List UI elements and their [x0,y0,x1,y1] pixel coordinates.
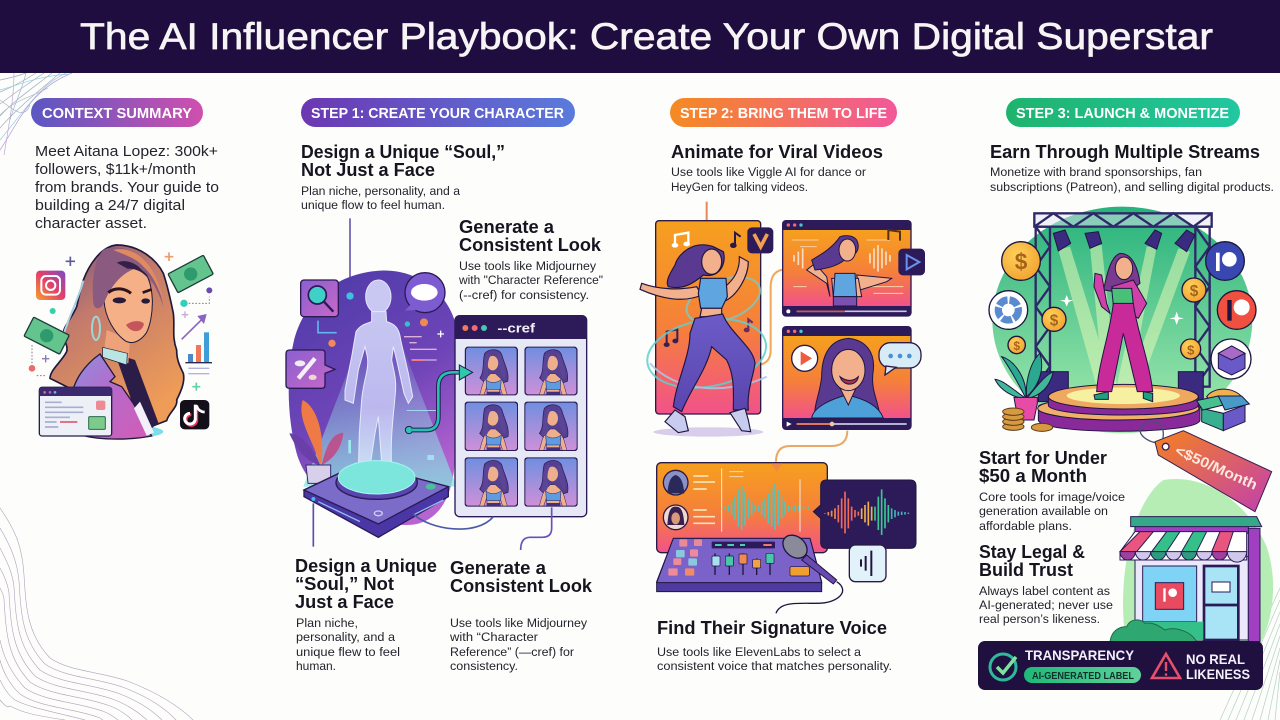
text block: start for under 50: affordable plans. [979,519,1072,533]
light beams [1058,245,1190,387]
icon: plant [289,400,343,483]
decorative line pattern: bottom right [1220,588,1280,720]
heading pill: context summary: CONTEXT SUMMARY [42,106,192,122]
icons: revenue circles [989,242,1256,379]
heading pill: step 2 [670,98,897,127]
price tag [1155,431,1272,512]
cref label: --cref [497,321,536,335]
tag string [1140,421,1163,443]
icon: player bar [786,309,907,313]
coin labels: $ [1050,312,1059,329]
icon: browser window [39,387,112,436]
text block: animate for viral videos [671,141,883,194]
panel: context summary [24,98,219,439]
connector: dance card to video [758,269,787,365]
text block: context summary: building a 24/7 digital [35,197,185,214]
text block: design a unique soul lower: Design a Unique [295,555,437,576]
icon: jacket [71,354,152,439]
heading pill: context summary [31,98,203,127]
panel: video window 1 [782,220,912,317]
icon: mixer [657,538,822,592]
no real likeness label: NO REAL [1186,651,1245,667]
icon: tiktok [180,400,209,429]
no real likeness label: LIKENESS [1186,666,1250,682]
icon: performer [1094,253,1153,402]
transparency label: TRANSPARENCY [1025,647,1135,663]
text block: context summary: character asset. [35,215,147,232]
text block: start for under 50 [979,447,1125,533]
price label: <$50/Month [1172,443,1260,494]
icon: player bar [787,422,907,427]
icon: check badge [990,654,1016,680]
text block: context summary: followers, $11k+/month [35,161,196,178]
illustration: character creation platform [286,218,587,550]
connector lines [347,218,352,297]
patreon mark [1163,588,1177,602]
text block: design a unique soul lower: “Soul,” Not [295,573,394,594]
icon: front hair [93,247,163,308]
text block: context summary [35,143,219,232]
panel: cref window [455,316,587,517]
icon: face [104,267,152,343]
connector: window to label [521,507,552,550]
connector: video to voice [776,431,847,462]
text block: find their signature voice: Find Their Signature Voice [657,617,887,638]
stage truss [1034,213,1212,387]
decorative data elements [318,292,444,460]
green backdrop [1123,479,1273,643]
text block: generate a consistent look: with "Character Reference" [458,273,603,287]
title banner [0,0,1280,73]
bush [1110,620,1197,642]
text block: context summary: from brands. Your guide to [35,179,219,196]
illustration: animation and voice [640,202,925,613]
green backdrop [992,207,1252,433]
text block: generate a consistent look lower: consistency. [450,659,518,673]
text block: start for under 50: Core tools for image/voice [979,490,1125,504]
icon: sparkles and dots [29,252,212,391]
text block: generate a consistent look: (--cref) for consistency. [459,288,589,302]
icon: shirt [134,402,154,436]
waveform: colorful [825,508,835,519]
text block: earn through multiple streams: subscriptions (Patreon), and selling digital products. [990,180,1274,194]
text block: stay legal and build trust: Stay Legal & [979,541,1085,562]
text block: generate a consistent look: Use tools like Midjourney [459,259,597,273]
light beam [303,340,457,487]
sparkles [1060,295,1184,325]
icon: dancer [640,245,755,433]
icon: talking head [812,338,883,418]
waveform [794,245,890,272]
text block: design a unique soul lower: Just a Face [295,591,394,612]
heading pill: step 1 [301,98,575,127]
heading pill: step 1: STEP 1: CREATE YOUR CHARACTER [311,106,565,122]
text block: stay legal and build trust [979,541,1113,626]
text block: animate for viral videos: HeyGen for talking videos. [671,180,808,194]
text block: earn through multiple streams [990,141,1274,194]
text block: generate a consistent look lower: Use tools like Midjourney [450,616,588,630]
spotlights [1053,230,1195,252]
text block: generate a consistent look lower: Reference” (—cref) for [450,645,574,659]
icon: money bill left [24,317,69,354]
illustration: storefront and price tag [1110,431,1273,643]
icon: pencil tile [286,350,335,388]
panel: video window 2 [782,326,921,430]
icon: motion swirls [642,268,772,397]
text block: find their signature voice: Use tools like ElevenLabs to select a [657,645,861,659]
text block: generate a consistent look: Consistent Look [459,234,602,255]
text block: animate for viral videos: Animate for Viral Videos [671,141,883,162]
door [1204,566,1238,640]
purple blob [289,271,458,525]
coin labels: $ [1013,339,1020,353]
panel: dance video card [640,221,772,437]
icon: chat bubble [879,343,921,375]
illustration: stage [989,207,1256,443]
icon: play tile [898,249,925,275]
icon: instagram [36,271,65,300]
coin labels: $ [1187,343,1195,358]
icon: magnifier tile [301,280,338,317]
text block: design a unique soul lower: unique flew to feel [296,645,400,659]
icon: avatars [663,470,688,530]
text block: stay legal and build trust: AI-generated; never use [979,598,1113,612]
icon: figure hologram [345,280,413,487]
title: The AI Influencer Playbook: Create Your Own Digital Superstar [80,15,1213,57]
text block: generate a consistent look lower: with “Character [449,630,538,644]
awning [1120,532,1247,562]
text block: design a unique soul: Not Just a Face [301,159,435,180]
text block: earn through multiple streams: Earn Through Multiple Streams [990,141,1260,162]
connector: platform to label [311,503,316,547]
icon: patreon marks [1216,252,1250,321]
icon: treasure box [1197,389,1249,431]
text block: generate a consistent look [458,216,603,302]
panel: step 3 [978,98,1274,690]
icon: viggle logo [747,227,773,253]
panel: step 1 [286,98,603,673]
chart: mini bar chart [182,314,212,374]
character reference tiles [465,347,577,506]
text block: design a unique soul lower: Plan niche, [296,616,358,630]
heading pill: step 3: STEP 3: LAUNCH & MONETIZE [1016,106,1229,122]
text block: generate a consistent look: Generate a [459,216,555,237]
text block: generate a consistent look lower [449,557,593,673]
heading pill: step 2: STEP 2: BRING THEM TO LIFE [680,106,887,122]
icon: play button [792,345,818,371]
coin labels [1013,248,1199,358]
panel: dark waveform [813,480,916,548]
icon: color wheel [998,300,1018,320]
storefront [1120,517,1262,642]
text block: generate a consistent look lower: Consistent Look [450,575,593,596]
icon: speech bubble [405,273,445,313]
text block: start for under 50: $50 a Month [979,465,1087,486]
icon: teal glow [90,425,163,438]
speakers [1038,372,1203,402]
icon: waveform tile [849,545,886,582]
icon: platform [304,461,448,537]
stage platform [1038,384,1200,431]
ai-generated label: AI-GENERATED LABEL [1032,671,1134,682]
icon: neck and choker [103,330,130,363]
text block: start for under 50: generation available on [979,504,1108,518]
text block: design a unique soul [301,141,505,212]
text block: stay legal and build trust: Build Trust [979,559,1073,580]
icon: microphone [776,530,843,613]
icon: money bill right [168,255,213,293]
coin labels: $ [1190,283,1199,300]
text block: design a unique soul lower: human. [296,659,336,673]
text block: stay legal and build trust: real person’s likeness. [979,612,1100,626]
text block: find their signature voice [657,617,892,673]
icon: warning triangle [1152,654,1180,678]
heading pill: step 3 [1006,98,1240,127]
no real likeness label [1186,651,1250,682]
text block: find their signature voice: consistent voice that matches personality. [657,659,892,673]
icon: coin stack [1003,408,1053,431]
illustration: influencer portrait [24,245,213,439]
connector: text to dance card [704,202,710,223]
ai-generated label [1024,667,1141,683]
icon: shadow under hair [115,353,158,435]
icon: plant [995,353,1053,420]
icon: music notes [664,233,753,347]
coin labels: $ [1015,248,1028,274]
text block: design a unique soul: unique flow to feel human. [301,198,445,212]
decorative line pattern: top left [0,73,72,155]
text block: design a unique soul lower: personality, and a [296,630,395,644]
text block: earn through multiple streams: Monetize with brand sponsorships, fan [990,165,1202,179]
text block: context summary: Meet Aitana Lopez: 300k+ [35,143,218,160]
panel: step 2 [640,98,925,673]
icon: hair [50,245,184,433]
icon: woman in video [807,236,892,306]
text block: design a unique soul: Plan niche, personality, and a [301,184,460,198]
text block: design a unique soul lower [295,555,437,673]
legal banner [978,641,1263,690]
text block: design a unique soul: Design a Unique “Soul,” [301,141,505,162]
panel: voice interface [657,463,827,553]
icon: earring [92,317,100,340]
arrow: hologram to references [405,365,473,434]
decorative line pattern: bottom left [0,508,193,720]
waveform: teal [725,483,808,530]
window [1143,566,1197,622]
connector: platform to window [413,514,493,529]
text block: start for under 50: Start for Under [979,447,1107,468]
icon: product box [1218,346,1245,375]
text block: animate for viral videos: Use tools like Viggle AI for dance or [671,165,866,179]
text block: generate a consistent look lower: Generate a [450,557,547,578]
text block: stay legal and build trust: Always label content as [979,584,1110,598]
